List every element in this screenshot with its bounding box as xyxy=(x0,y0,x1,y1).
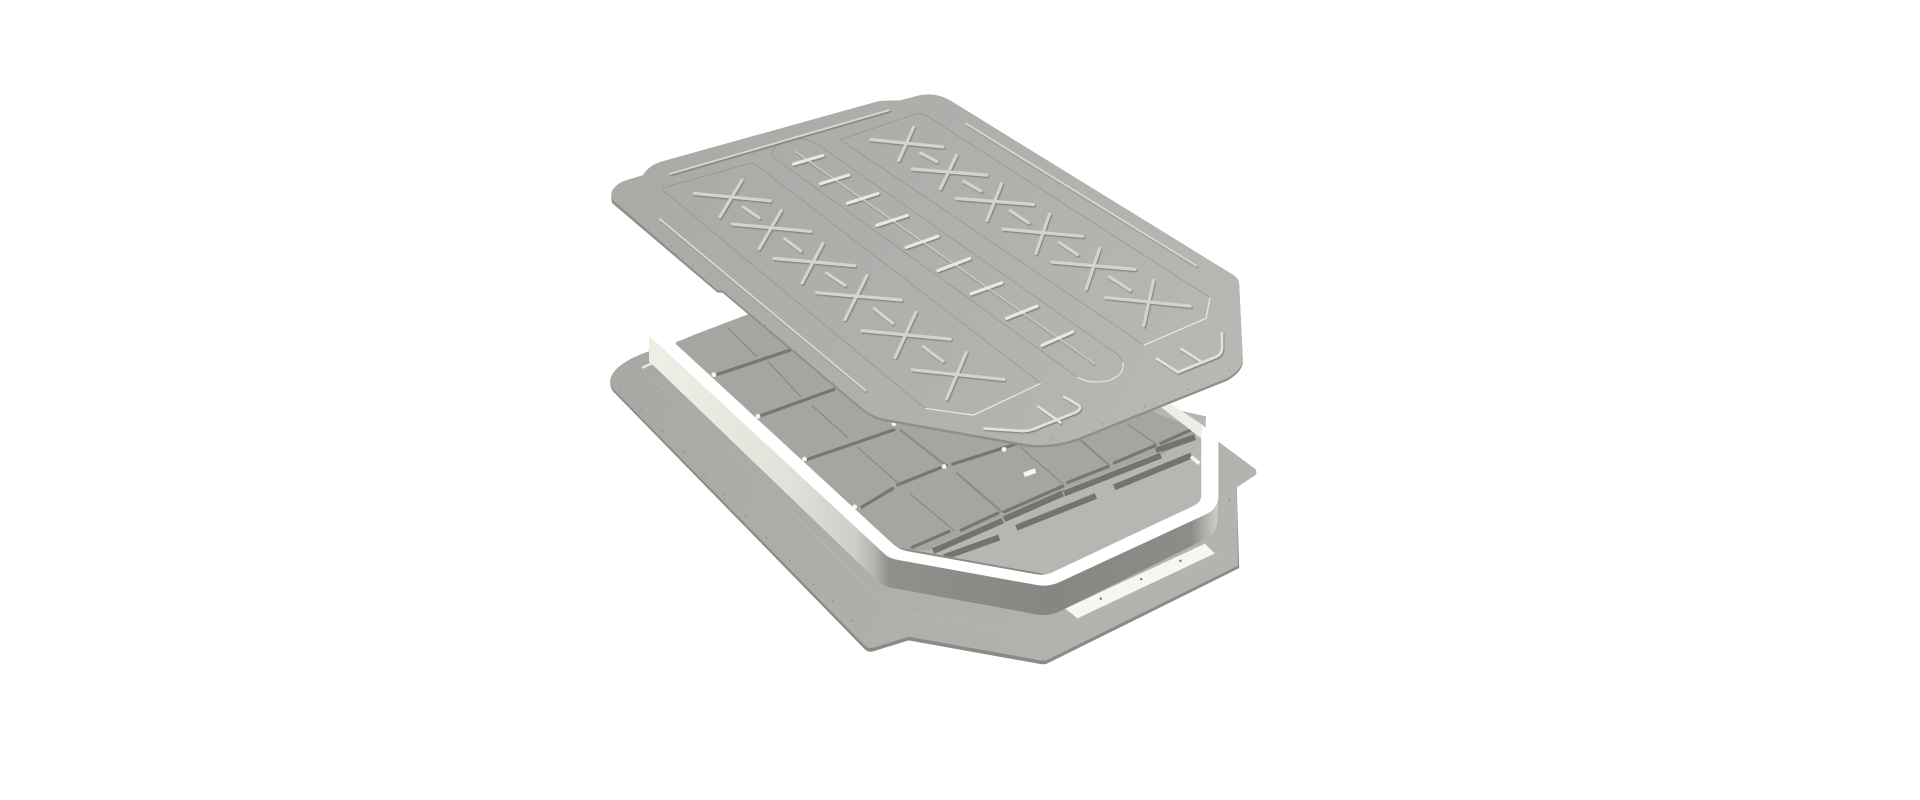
centre channel bright end xyxy=(1078,362,1123,382)
right recessed panel xyxy=(840,113,1210,345)
long edge ribs xyxy=(660,110,1196,391)
corner hooked ribs xyxy=(984,333,1222,431)
plate surface xyxy=(611,94,1243,445)
module separators xyxy=(729,328,1157,531)
module connectors xyxy=(711,372,1201,509)
right panel bright lower edge xyxy=(1144,298,1210,345)
thick module separators xyxy=(900,430,1109,512)
plate underside edge xyxy=(611,96,1243,447)
busbar highlights xyxy=(933,452,1161,547)
base plate corner tab xyxy=(643,364,651,367)
frame outer wall xyxy=(649,336,1218,615)
busbar channels xyxy=(933,437,1195,557)
module gaps xyxy=(716,350,1194,547)
base plate inner seam xyxy=(654,380,1224,637)
top cover plate xyxy=(611,94,1243,447)
frame top rim xyxy=(649,328,1218,586)
base plate xyxy=(610,343,1256,664)
centre spine rib xyxy=(793,152,1095,364)
white mounting strip xyxy=(1065,544,1215,618)
battery module floor xyxy=(676,294,1206,575)
left recessed panel xyxy=(662,164,1041,415)
battery modules xyxy=(676,294,1195,551)
right column cross ribs xyxy=(871,127,1190,326)
frame rear corner inner face xyxy=(1157,400,1202,438)
left column cross ribs xyxy=(694,180,1004,399)
centre recessed channel xyxy=(772,139,1123,382)
left panel bright lower edge xyxy=(926,383,1041,415)
base plate rivets xyxy=(620,389,1230,622)
plate edge rivets xyxy=(626,207,1230,439)
